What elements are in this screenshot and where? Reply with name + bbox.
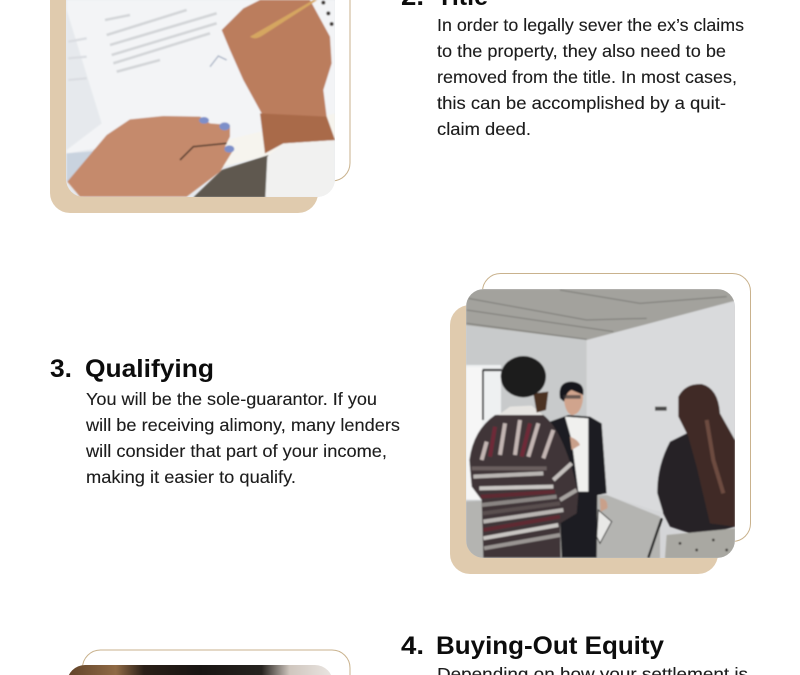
- text: qualifying body: will be receiving alimony, many lenders: [85, 415, 400, 435]
- woman in black suit: [550, 415, 607, 558]
- panel: qualifying photo frame: [450, 274, 750, 574]
- text: qualifying body: will consider that part of your income,: [85, 441, 387, 461]
- panel: buying-out photo frame: [60, 650, 350, 675]
- text: heading 3 qualifying: 3.: [50, 355, 72, 383]
- photo: hands signing a document: [66, 0, 335, 200]
- text: heading 4 buying-out equity: 4.: [401, 632, 424, 660]
- hand: left: [67, 116, 233, 197]
- sleeve: [265, 141, 335, 197]
- hand: right: [222, 0, 335, 153]
- text: heading 3 qualifying: Qualifying: [85, 355, 214, 383]
- photo: three people in an empty room: [466, 289, 735, 558]
- photo: cropped dark photo: [68, 665, 331, 675]
- text: title body: claim deed.: [437, 119, 531, 139]
- text: title body: [437, 15, 744, 139]
- text: heading 2 title: [401, 0, 488, 11]
- text: title body: In order to legally sever the ex’s claims: [437, 15, 744, 35]
- text: title body: to the property, they also need to be: [437, 41, 726, 61]
- text: title body: removed from the title. In most cases,: [437, 67, 737, 87]
- panel: title photo frame: [50, 0, 350, 213]
- text: qualifying body: You will be the sole-guarantor. If you: [86, 389, 377, 409]
- man in striped shirt: [469, 413, 578, 558]
- text: qualifying body: [85, 389, 400, 487]
- text: heading 4 buying-out equity: Buying-Out Equity: [436, 632, 664, 660]
- woman with long hair: [657, 432, 735, 537]
- text: title body: this can be accomplished by a quit-: [437, 93, 726, 113]
- text: qualifying body: making it easier to qualify.: [86, 467, 296, 487]
